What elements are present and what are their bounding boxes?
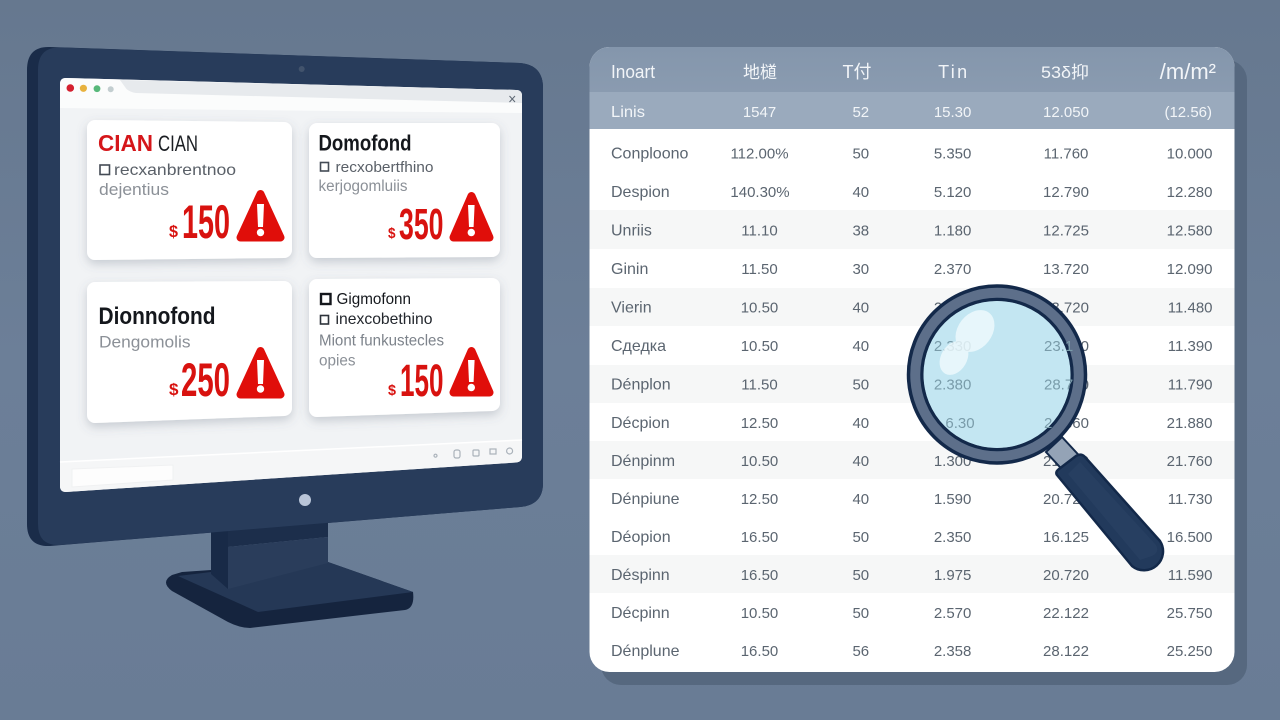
card: Dionnofond [95,289,284,415]
row 6: Сдедка [611,338,666,355]
row 13: 25.750 [1167,605,1212,622]
row 4: 13.720 [1043,261,1089,278]
row 3: 12.580 [1167,222,1212,240]
lens text: 6.30 [945,415,975,432]
card title: CIAN [158,131,198,156]
traffic lights [66,84,114,92]
close button [510,96,515,102]
row 2 [611,184,1212,201]
table subheader: (12.56) [1164,104,1212,121]
row 1: 5.350 [934,146,971,162]
card: Domofond [317,130,492,250]
row 8: 21.860 [1043,415,1089,432]
row 7: 50 [852,376,869,394]
row 5: 11.480 [1168,300,1212,316]
row 2: 12.280 [1167,184,1212,201]
row 2: 5.120 [934,184,971,201]
row 6: 10.50 [741,338,778,355]
row 11: Déopion [611,529,671,546]
row 5 [590,288,1234,326]
price: 150 [400,355,444,406]
row 8: 21.880 [1167,415,1212,432]
row 14: Dénplune [611,643,680,660]
row 13 [611,605,1212,622]
price: $ [169,222,179,241]
card description: Miont funkustecles [319,332,444,350]
row 7: 2.380 [934,376,971,394]
icon: magnifying glass [908,286,1163,570]
row 12: 16.50 [741,567,778,584]
row 1: 10.000 [1167,146,1212,162]
row 10: 20.720 [1043,491,1089,508]
row 11: 50 [852,529,869,546]
row 8: 12.50 [741,415,778,432]
table subheader: 15.30 [934,104,971,121]
card description [99,162,236,199]
browser tab bar [120,80,522,103]
row 14 [611,643,1212,660]
row 3: 38 [852,222,869,240]
card description: inexcobethino [336,311,433,328]
table header: /m/m² [1160,59,1216,84]
row 8 [611,415,1212,432]
row 5: Vierin [611,300,652,316]
row 12 [590,555,1234,593]
magnifier lens [922,300,1073,450]
table header: Tin [938,62,967,82]
magnifier rim [908,286,1086,463]
row 7: 11.50 [741,376,778,394]
row 6: 40 [852,338,869,355]
row 7 [590,365,1234,403]
row 13: Décpinn [611,605,670,622]
row 11: 16.125 [1043,529,1089,546]
row 13: 50 [852,605,869,622]
row 5: 2.310 [934,300,971,316]
row 10: 40 [852,491,869,508]
browser window [60,78,522,492]
card title: Gigmofonn [336,291,411,308]
row 6: 23.120 [1043,338,1089,355]
row 3: 11.10 [741,222,778,240]
price: 350 [399,200,444,249]
row 9: 10.50 [741,453,778,470]
card description: recxanbrentnoo [114,162,236,179]
row 14: 28.122 [1043,643,1089,660]
row 9: 1.300 [934,453,971,470]
price [388,355,444,406]
row 1: 50 [852,146,869,162]
row 5: 40 [852,300,869,316]
row 10: 12.50 [741,491,778,508]
row 13: 2.570 [934,605,971,622]
footer icons [434,448,513,458]
lens text [934,338,1073,432]
row 3: 12.725 [1043,222,1089,240]
row 6: 11.390 [1168,338,1212,355]
row 7: Dénplon [611,376,671,394]
table subheader: 52 [852,104,869,121]
row 12: Déspinn [611,567,670,584]
row 4: 30 [852,261,869,278]
row 6 [611,338,1212,355]
row 4: 11.50 [741,261,778,278]
row 14: 56 [852,643,869,660]
row 1: 112.00% [730,146,789,162]
row 11 [611,529,1212,546]
row 14: 25.250 [1167,643,1212,660]
card description [318,159,434,195]
row 4: 12.090 [1167,261,1212,278]
table header [589,47,1235,92]
row 10: Dénpiune [611,491,680,508]
lens highlight [934,302,1003,380]
icon: warning [454,196,490,238]
lens text: 2.330 [934,338,971,355]
row 1: 11.760 [1044,146,1088,162]
row 12: 11.590 [1168,567,1212,584]
row 9 [590,441,1234,479]
table header: T付 [842,62,872,82]
price: $ [388,225,396,242]
panel: data table [589,47,1235,672]
table subheader: Linis [611,104,645,121]
card description: opies [319,352,356,370]
row 7: 28.710 [1043,376,1089,394]
table header: 地檤 [743,63,777,82]
row 9: 21.720 [1043,453,1089,470]
monitor bezel [27,47,543,546]
row 4: Ginin [611,261,648,278]
row 12: 50 [852,567,869,584]
card description: kerjogomluiis [318,178,408,195]
row 3: 1.180 [934,222,971,240]
row 11: 16.500 [1167,529,1212,546]
webcam [299,66,305,72]
price: 150 [182,195,230,248]
row 11: 2.350 [934,529,971,546]
row 6: 2.330 [934,338,971,355]
row 3: Unriis [611,222,652,240]
row 10 [611,491,1212,508]
row 2: 12.790 [1043,184,1089,201]
price: $ [169,380,179,399]
row 10: 1.590 [934,491,971,508]
row 13: 10.50 [741,605,778,622]
lens text: 23.1 [1044,338,1073,355]
card title [98,130,198,156]
browser footer [60,440,522,492]
row 8: Décpion [611,415,670,432]
price: 250 [181,353,230,406]
lens text: 2 [1044,415,1052,432]
row 5: 13.720 [1043,300,1089,316]
row 4: 2.370 [934,261,971,278]
row 12: 1.975 [934,567,971,584]
search input [72,465,173,487]
row 1: Conploono [611,146,688,162]
price [388,200,444,249]
row 2: Despion [611,184,670,201]
icon: warning [240,194,280,238]
power button [299,494,311,506]
row 13: 22.122 [1043,605,1089,622]
card title: Dionnofond [98,303,216,330]
card description: recxobertfhino [336,159,434,176]
row 3 [590,210,1234,249]
price [169,353,230,406]
row 7: 11.790 [1168,376,1212,394]
table shadow [601,60,1247,685]
table subheader: 12.050 [1043,104,1089,121]
monitor stand [166,520,413,628]
magnifier handle [1056,455,1163,570]
table subheader: 1547 [743,104,776,121]
monitor [27,47,543,628]
row 11: 16.50 [741,529,778,546]
table subheader [590,92,1234,129]
row 1 [611,146,1212,162]
price: $ [388,382,397,399]
table header: Inoart [611,62,655,82]
price [169,195,230,248]
row 2: 40 [852,184,869,201]
icon: warning [454,351,490,392]
row 4 [611,261,1212,278]
card title: Domofond [318,130,412,156]
row 9: Dénpinm [611,453,675,470]
row 14: 16.50 [741,643,778,660]
row 8: 40 [852,415,869,432]
row 14: 2.358 [934,643,971,660]
card description: dejentius [99,180,169,199]
lens text: 28.7 [1044,376,1073,394]
row 9: 21.760 [1167,453,1212,470]
row 9: 40 [852,453,869,470]
card title: CIAN [98,130,153,156]
row 12: 20.720 [1043,567,1089,584]
card: CIAN [95,128,284,252]
row 8: 6.30 [938,415,967,432]
icon: warning [240,351,280,394]
card description [319,311,444,370]
row 2: 140.30% [730,184,790,201]
card description: Dengomolis [99,332,190,352]
card: Gigmofonn [317,286,492,409]
table header: 53δ抑 [1041,63,1089,82]
row 10: 11.730 [1168,491,1212,508]
magnifier neck [1046,437,1086,478]
lens text: 2.380 [934,376,971,394]
row 5: 10.50 [741,300,778,316]
